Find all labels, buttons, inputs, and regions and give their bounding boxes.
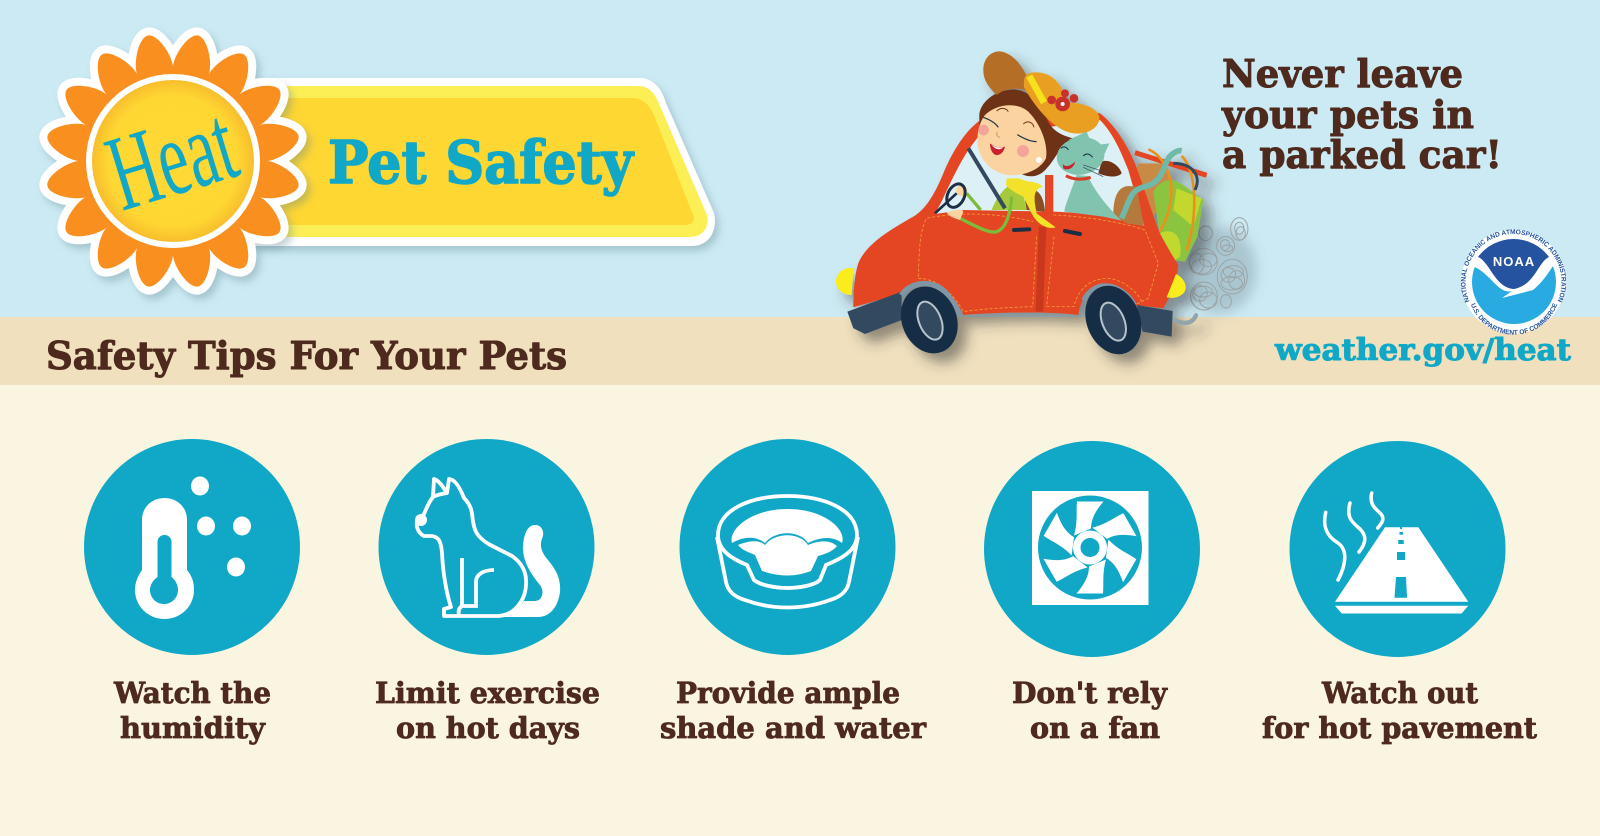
tip 5: hot pavement [1290, 441, 1506, 657]
center door seam [1039, 227, 1043, 312]
lights [836, 268, 1186, 298]
stitching [918, 214, 1158, 312]
sun text: Heat: Heat [94, 83, 250, 234]
tip 1: watch the humidity [84, 439, 300, 655]
caption: don't rely on a fan [1012, 676, 1168, 745]
icon: thermometer and droplets [135, 476, 251, 619]
icon: box fan [1032, 491, 1148, 605]
caption: watch the humidity: Watch the [113, 676, 271, 710]
car windows [935, 120, 1144, 226]
NOAA logo: NATIONAL OCEANIC AND ATMOSPHERIC ADMINISTRATION [1460, 229, 1566, 303]
wheels [891, 277, 1151, 363]
cat [1054, 132, 1122, 221]
heading: never leave your pets in a parked car [1221, 51, 1502, 177]
tip 4: don't rely on a fan [984, 441, 1200, 657]
illustration: car with woman and cat [836, 51, 1207, 363]
caption: provide ample shade and water: shade and water [660, 711, 927, 745]
caption: watch out for hot pavement: Watch out [1321, 676, 1479, 710]
window brown seat and bag [1113, 186, 1144, 226]
wheel arches [901, 283, 1135, 315]
heading: never leave your pets in a parked car: a parked car! [1222, 132, 1502, 177]
exhaust pipe [1173, 315, 1196, 323]
caption: watch out for hot pavement: for hot pavement [1262, 711, 1538, 745]
door pillar [1045, 175, 1053, 213]
caption: provide ample shade and water [660, 676, 927, 745]
car body [853, 107, 1178, 315]
title banner [250, 78, 715, 246]
caption: limit exercise on hot days [375, 676, 600, 745]
caption: provide ample shade and water: Provide ample [676, 676, 900, 710]
caption: limit exercise on hot days: on hot days [396, 711, 580, 745]
caption: watch the humidity: humidity [120, 711, 266, 745]
woman [935, 89, 1122, 232]
website url: weather.gov/heat [1274, 333, 1571, 368]
door handles [1014, 229, 1080, 234]
heading: never leave your pets in a parked car: Never leave [1222, 51, 1463, 96]
road band [0, 317, 1600, 385]
NOAA logo [1460, 229, 1566, 335]
caption: don't rely on a fan: on a fan [1030, 711, 1160, 745]
hat [983, 51, 1099, 134]
icon: sitting cat [415, 479, 560, 617]
illustration: exhaust smoke [1183, 218, 1257, 313]
NOAA logo: U.S. DEPARTMENT OF COMMERCE [1471, 303, 1558, 335]
luggage on back of car [1113, 149, 1207, 262]
background: sky [0, 0, 1600, 317]
sun badge [44, 32, 302, 290]
caption: watch the humidity [113, 676, 271, 745]
measuring tape [1122, 151, 1182, 218]
NOAA logo: NOAA [1493, 254, 1535, 269]
caption: don't rely on a fan: Don't rely [1012, 676, 1168, 710]
bumpers [847, 292, 1173, 337]
caption: watch out for hot pavement [1262, 676, 1538, 745]
tip 3: shade and water [680, 439, 896, 655]
section heading: Safety Tips For Your Pets [46, 333, 567, 378]
icon: road with heat waves [1325, 493, 1468, 614]
tip 2: limit exercise [378, 439, 594, 655]
heading: never leave your pets in a parked car: your pets in [1221, 92, 1474, 137]
caption: limit exercise on hot days: Limit exercise [375, 676, 600, 710]
title text: Pet Safety: Pet Safety [328, 128, 635, 197]
icon: pet bed [717, 496, 858, 608]
